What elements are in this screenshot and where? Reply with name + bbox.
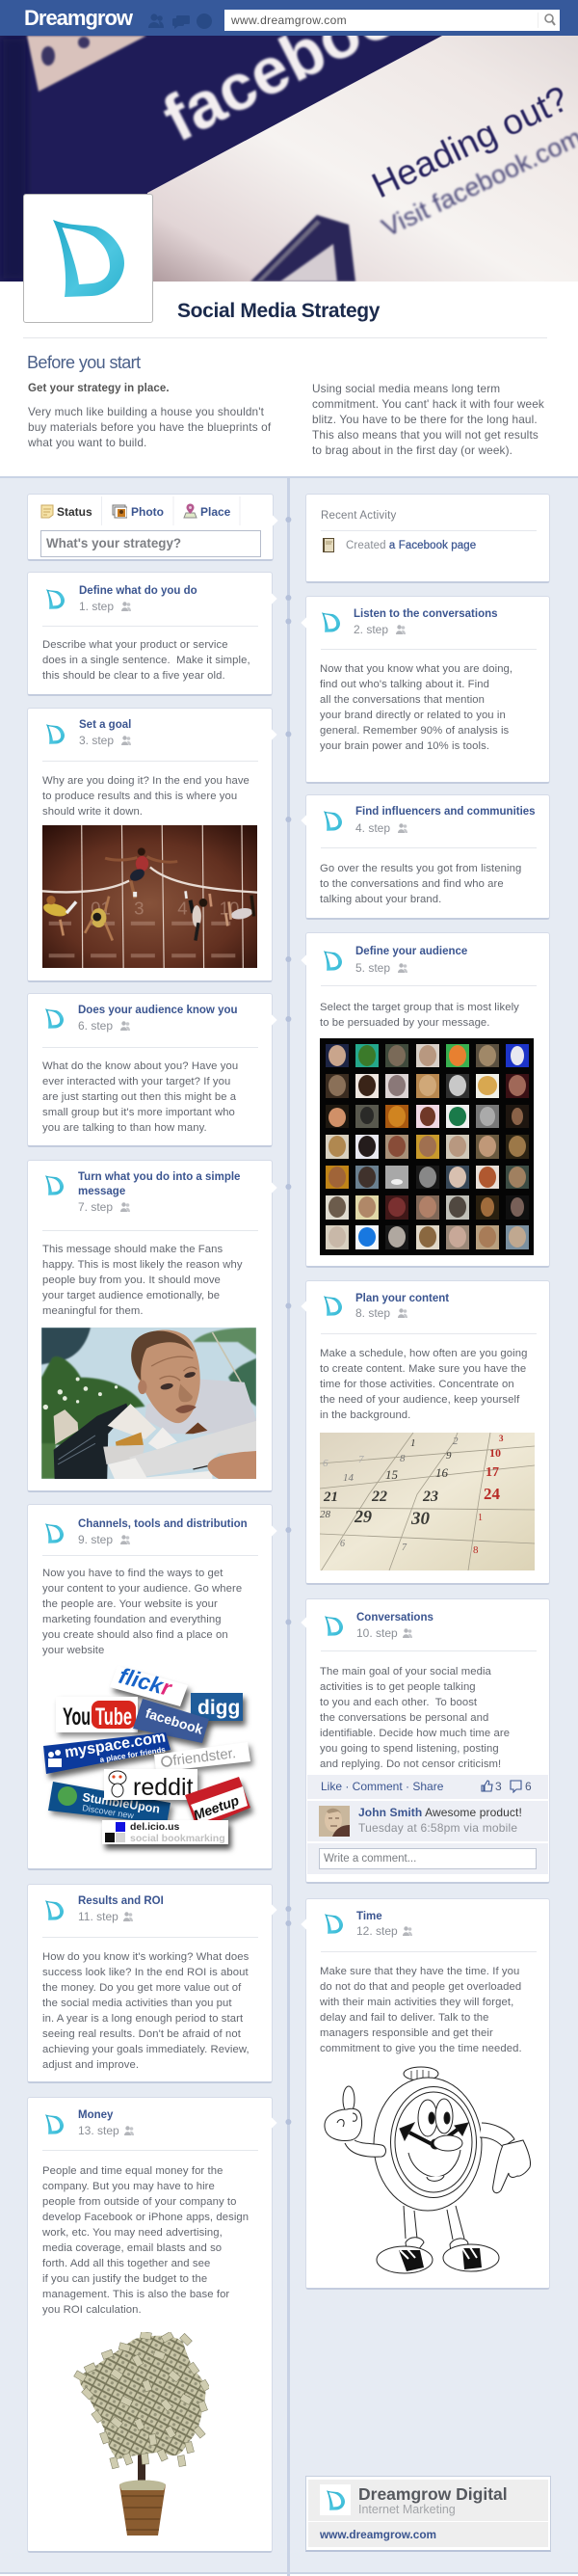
search icon (538, 13, 556, 28)
step number (356, 1923, 412, 1939)
pointer (301, 815, 312, 826)
title: Social Media Strategy (177, 300, 380, 322)
step number: 9. step (78, 1533, 113, 1546)
step text: your brain power and 10% is tools. (320, 740, 489, 752)
tab separators (101, 496, 241, 525)
step text: happy. This is most likely the reason why (42, 1259, 243, 1271)
heading: Before you start (27, 353, 140, 372)
photo: man reading letter at mailbox (41, 1328, 256, 1479)
panel: step 9 channels and tools (27, 1504, 273, 1870)
image: social network logo pile: You (63, 1704, 91, 1731)
pointer (301, 954, 312, 966)
step text: managers responsible and get their (320, 2027, 493, 2039)
left paragraph: what you want to build. (28, 436, 146, 449)
search box (224, 10, 560, 31)
icon: D logo (325, 1616, 343, 1636)
icon: D logo (46, 724, 65, 744)
photo: calendar page: 1 (410, 1437, 416, 1449)
right paragraph: This also means that you will not get results (312, 428, 539, 442)
step number: 8. step (355, 1306, 390, 1320)
step title: Define what do you do (79, 585, 197, 597)
step text: in. A year is a long enough period to start (42, 2013, 243, 2025)
icon: D logo (327, 2490, 345, 2510)
divider line (321, 649, 537, 650)
step text (320, 1002, 519, 1029)
step title: Channels, tools and distribution (78, 1518, 248, 1530)
panel: step 6 does your audience know you (27, 993, 273, 1147)
step text: does in a single sentence. Make it simple, (42, 655, 250, 666)
step number: 4. step (355, 821, 390, 835)
step text: should write it down. (42, 806, 143, 818)
photo grid: audience avatars (320, 1038, 534, 1255)
step title: Conversations (356, 1612, 434, 1623)
step text: This message should make the Fans (42, 1244, 223, 1255)
image: social network logo pile: reddit (133, 1774, 194, 1801)
icon: place pin (183, 503, 197, 519)
heading: Recent Activity (321, 510, 396, 522)
step text: your target audience emotionally, be (42, 1290, 220, 1301)
right paragraph: to brag about in the first day (or week). (312, 443, 512, 457)
step text: forth. Add all this together and see (42, 2258, 210, 2269)
pointer (266, 1014, 277, 1026)
step text: with their main activities they will forget, (320, 1997, 513, 2008)
photo: calendar page: 6 (323, 1458, 328, 1469)
step number: 2. step (354, 623, 388, 636)
pointer (266, 593, 277, 604)
step text: to produce results and this is where you (42, 791, 237, 802)
timeline dots (285, 517, 291, 2125)
divider line (321, 985, 537, 986)
photo: calendar page: 6 (340, 1539, 345, 1549)
photo: calendar page: 23 (422, 1489, 438, 1505)
step text: success look like? In the end ROI is about (42, 1967, 249, 1978)
step text: to be persuaded by your message. (320, 1017, 490, 1029)
right paragraph: Using social media means long term (312, 382, 500, 395)
step text: to create content. Make sure you have the (320, 1363, 526, 1375)
step text: find out who's talking about it. Find (320, 679, 489, 690)
step text (42, 1244, 243, 1317)
icon: D logo (45, 2114, 64, 2134)
step number: 5. step (355, 961, 390, 975)
icon: D logo (324, 811, 342, 831)
step title: Results and ROI (78, 1895, 164, 1907)
photo: calendar page: 9 (446, 1450, 452, 1462)
step title: message (78, 1186, 125, 1197)
divider line (321, 530, 537, 531)
step text (320, 863, 521, 905)
step title: Money (78, 2109, 113, 2121)
photo: calendar page: 28 (320, 1509, 331, 1520)
step text: People and time equal money for the (42, 2165, 223, 2177)
comment text: John Smith Awesome product! (358, 1806, 522, 1819)
left paragraph: buy materials before you have the blueprints of (28, 420, 271, 434)
step text: commitment to give you the time needed. (320, 2043, 522, 2054)
comment row (307, 1801, 548, 1841)
photo: sprinters at finish line: 3 (134, 899, 144, 919)
panel: step 11 results and roi (27, 1884, 273, 2083)
image: social network logo pile: Discover new (82, 1803, 135, 1821)
step text: How do you know it's working? What does (42, 1951, 249, 1963)
icon: status note (40, 505, 54, 519)
icon: comment bubble (510, 1780, 522, 1793)
step text: Describe what your product or service (42, 639, 228, 651)
step text (42, 1566, 242, 1658)
badge top band (308, 2480, 548, 2521)
photo: calendar page: 7 (358, 1454, 364, 1465)
like comment share links: Like · Comment · Share (321, 1780, 443, 1793)
intro: before you start (23, 337, 547, 457)
pointer (301, 1919, 312, 1930)
step text: general. Remember 90% of analysis is (320, 725, 509, 737)
panel: recent activity (305, 494, 550, 583)
image: social network logo pile: Meetup (192, 1792, 241, 1823)
icon: D logo (45, 1900, 64, 1920)
panel: step 8 plan your content (305, 1280, 550, 1585)
divider line (321, 847, 537, 848)
image: social network logo pile: Tube (95, 1704, 132, 1731)
step number: 13. step (78, 2124, 119, 2137)
pointer (266, 1525, 277, 1537)
step number: 1. step (79, 600, 114, 613)
step text: do not do that and people get overloaded (320, 1981, 521, 1993)
step text (320, 1664, 510, 1772)
divider line (321, 1650, 537, 1651)
photo: calendar page: 16 (435, 1465, 449, 1480)
illustration: cartoon clock character (318, 2053, 539, 2285)
step number (78, 1532, 130, 1547)
photo: calendar page: 24 (484, 1485, 501, 1503)
right paragraph: blitz. You have to be there for the long haul. (312, 413, 538, 426)
photo: calendar page: 14 (343, 1472, 355, 1484)
icon: Dreamgrow D logo (53, 220, 124, 297)
panel: Dreamgrow Digital page badge (305, 2476, 551, 2552)
image: social network logo pile (39, 1663, 260, 1861)
divider line (42, 1555, 258, 1556)
likes count: 3 (495, 1780, 502, 1793)
pointer (266, 1904, 277, 1916)
step text: What do the know about you? Have you (42, 1060, 238, 1072)
icon: D logo (46, 589, 65, 609)
website link: www.dreamgrow.com (320, 2528, 436, 2541)
top navigation bar (0, 0, 578, 36)
photo: sprinters at finish line: 4 (177, 899, 187, 919)
photo: calendar page (320, 1433, 535, 1570)
step title: Plan your content (355, 1293, 449, 1304)
divider line (23, 337, 547, 338)
photo: calendar page: 17 (486, 1465, 499, 1480)
nav icons (148, 13, 212, 29)
right paragraph (312, 382, 544, 457)
step number (355, 821, 407, 835)
step text (320, 1964, 522, 2056)
step text: the social media activities than you put (42, 1998, 232, 2009)
search url: www.dreamgrow.com (231, 13, 347, 27)
step text (42, 639, 250, 682)
pointer (301, 617, 312, 629)
step text: Make sure that they have the time. If you (320, 1966, 519, 1977)
image: social network logo pile: digg (197, 1697, 240, 1719)
step number (355, 1305, 407, 1321)
step text: Now that you know what you are doing, (320, 663, 512, 675)
step number (354, 623, 406, 636)
step text: if you can justify the budget to the (42, 2273, 207, 2285)
profile picture box (23, 194, 153, 323)
step text: small group but it's more important who (42, 1107, 235, 1118)
like bar (307, 1775, 548, 1799)
icon: D logo (45, 1175, 64, 1195)
photo: sprinters at finish line: 01 (91, 899, 110, 919)
step text (42, 1949, 250, 2073)
step number (78, 1909, 133, 1924)
step text: your website (42, 1645, 104, 1656)
step number (78, 1200, 130, 1214)
image: social network logo pile: myspace.com (64, 1730, 167, 1761)
photo: calendar page: 7 (402, 1543, 407, 1553)
photo: calendar page: 29 (354, 1507, 372, 1526)
activity line: Created a Facebook page (346, 540, 476, 551)
image: social network logo pile: a place for friends (99, 1745, 167, 1764)
step number (356, 1625, 412, 1641)
panel: step 3 set a goal (27, 708, 273, 982)
image: social network logo pile: friendster. (171, 1745, 237, 1769)
step text: in the background. (320, 1409, 410, 1421)
image: social network logo pile: flickr (117, 1663, 175, 1701)
photo: calendar page: 10 (489, 1446, 501, 1460)
step title: Time (356, 1911, 382, 1922)
panel: step 7 simple message (27, 1160, 273, 1492)
step text: people from outside of your company to (42, 2196, 236, 2208)
step text: ever interacted with your target? If you (42, 1076, 230, 1087)
step text: you are talking to than how many. (42, 1122, 207, 1134)
icon: D logo (324, 951, 342, 971)
photo: calendar page: 3 (499, 1434, 504, 1443)
step text: the money. Do you get more value out of (42, 1982, 241, 1994)
right paragraph: commitment. You cant' hack it with four week (312, 397, 544, 411)
step text: to the conversations and find who are (320, 878, 504, 890)
step number: 11. step (78, 1910, 118, 1923)
step number: 12. step (356, 1924, 398, 1938)
panel: step 13 money (27, 2097, 273, 2553)
photo: calendar page: 2 (453, 1436, 459, 1447)
brand wordmark: Dreamgrow (24, 6, 132, 30)
divider line (42, 626, 258, 627)
badge link band (308, 2522, 548, 2547)
timeline spine (287, 478, 290, 2576)
step text: develop Facebook or iPhone apps, design (42, 2212, 249, 2223)
step title: Turn what you do into a simple (78, 1171, 240, 1183)
photo: calendar page: 30 (410, 1509, 430, 1529)
step text: this should be clear to a five year old. (42, 670, 225, 682)
step title: Does your audience know you (78, 1005, 238, 1016)
step text: activities is to get people talking (320, 1681, 476, 1693)
step number: 7. step (78, 1200, 113, 1214)
step text (320, 663, 512, 752)
panel: step 5 define your audience (305, 932, 550, 1268)
image: social network logo pile: social bookmarking (130, 1833, 225, 1844)
step text: the need of your audience, keep yourself (320, 1394, 519, 1406)
step text: seeing real results. Don't be afraid of not (42, 2028, 241, 2040)
panel: step 12 time (305, 1898, 550, 2290)
photo: calendar page: 1 (478, 1513, 483, 1523)
divider line (42, 1230, 258, 1231)
step number: 10. step (356, 1626, 398, 1640)
image: social network logo pile: facebook (144, 1705, 205, 1737)
step number (78, 1019, 130, 1033)
step text: company. But you may have to hire (42, 2181, 215, 2192)
photo: calendar page: 8 (400, 1453, 406, 1464)
left paragraph: Very much like building a house you shouldn't (28, 405, 264, 418)
step text: talking about your brand. (320, 894, 441, 905)
step text: your brand directly or related to you in (320, 710, 506, 721)
step title: Find influencers and communities (355, 806, 536, 818)
panel: step 4 find influencers (305, 794, 550, 920)
cover photo: facebook screen: Heading out? (366, 78, 574, 205)
pointer (266, 2117, 277, 2129)
step title (78, 1171, 240, 1197)
step text: Now you have to find the ways to get (42, 1568, 223, 1579)
badge logo square (320, 2484, 351, 2515)
panel: step 10 conversations (305, 1598, 550, 1884)
photo: calendar page: 15 (385, 1467, 399, 1482)
strategy input (40, 530, 261, 557)
comment meta: Tuesday at 6:58pm via mobile (358, 1821, 517, 1835)
step text: and replying. Do not censor criticism! (320, 1758, 501, 1770)
step text (42, 1060, 238, 1134)
step text: management. This is also the base for (42, 2289, 229, 2300)
step text: your content to your audience. Go where (42, 1583, 242, 1595)
comments count: 6 (525, 1780, 532, 1793)
photo: sprinters at finish line (42, 825, 257, 968)
divider line (42, 1937, 258, 1938)
step text: the people are. Your website is your (42, 1598, 218, 1610)
step text: Make a schedule, how often are you going (320, 1348, 527, 1359)
company name: Dreamgrow Digital (358, 2484, 508, 2504)
comment input (319, 1848, 537, 1869)
input placeholder: What's your strategy? (46, 536, 181, 550)
step number: 3. step (79, 734, 114, 747)
step text (42, 2163, 249, 2318)
left paragraph (28, 405, 272, 449)
icon: D logo (324, 1296, 342, 1316)
image: social network logo pile: del.icio.us (130, 1821, 180, 1833)
panel: step 2 listen (305, 596, 550, 784)
step number: 6. step (78, 1019, 113, 1033)
icon: D logo (325, 1914, 343, 1934)
step text: are just starting out then this might be a (42, 1091, 236, 1103)
commenter avatar (319, 1806, 350, 1837)
pointer (267, 515, 278, 526)
step number (79, 734, 131, 747)
panel: status composer (27, 494, 274, 561)
step text: achieving your goals immediately. Review, (42, 2044, 250, 2055)
place tab: Place (200, 505, 230, 519)
divider line (42, 2150, 258, 2151)
icon: thumb up (481, 1780, 493, 1792)
pointer (266, 729, 277, 740)
photo tab: Photo (131, 505, 164, 519)
icon: D logo (322, 612, 340, 632)
step text (42, 775, 250, 818)
company tagline: Internet Marketing (358, 2503, 456, 2516)
step title: Listen to the conversations (354, 608, 498, 620)
step text: Select the target group that is most likely (320, 1002, 519, 1013)
cover photo: facebook screen (0, 36, 578, 282)
photo: calendar page: 8 (473, 1544, 479, 1556)
step text: Go over the results you got from listening (320, 863, 521, 874)
pointer (301, 1301, 312, 1312)
write comment row (307, 1843, 548, 1874)
image: money tree (73, 2332, 209, 2537)
step number (355, 961, 407, 975)
icon: book (323, 538, 334, 552)
step text: delay and fail to deliver. Talk to the (320, 2012, 489, 2024)
step text: The main goal of your social media (320, 1666, 491, 1677)
photo: calendar page: 22 (371, 1489, 387, 1505)
icon: D logo (45, 1523, 64, 1543)
icon: photo (112, 505, 127, 519)
pointer (301, 1617, 312, 1628)
step text: marketing foundation and everything (42, 1614, 222, 1625)
step text: people buy from you. It should move (42, 1275, 221, 1286)
step text: identifiable. Decide how much time are (320, 1728, 510, 1739)
panel: step 1 define what you do (27, 572, 273, 696)
lead sentence: Get your strategy in place. (28, 383, 170, 394)
step text: you create should also find a place on (42, 1629, 228, 1641)
step number (79, 600, 131, 613)
divider line (321, 1951, 537, 1952)
step text: all the conversations that mention (320, 694, 485, 706)
pointer (266, 1182, 277, 1194)
step text: you ROI calculation. (42, 2304, 142, 2316)
step text: Why are you doing it? In the end you have (42, 775, 250, 787)
step text: meaningful for them. (42, 1305, 144, 1317)
step text: the conversations be personal and (320, 1712, 488, 1724)
icon: D logo (45, 1008, 64, 1029)
step text: to you and each other. To boost (320, 1697, 477, 1708)
photo: calendar page: 21 (323, 1489, 338, 1505)
divider line (42, 1047, 258, 1048)
step text: media coverage, email blasts and so (42, 2242, 222, 2254)
step text: adjust and improve. (42, 2059, 139, 2071)
step text: time for those activities. Concentrate on (320, 1379, 514, 1390)
photo: sprinters at finish line: 10 (219, 899, 239, 919)
status tab: Status (57, 505, 92, 519)
divider line (42, 761, 258, 762)
image: social network logo pile: StumbleUpon (82, 1790, 161, 1816)
step text: you going to spend listening, posting (320, 1743, 499, 1755)
step title: Define your audience (355, 946, 467, 957)
step text (320, 1346, 527, 1423)
step text: work, etc. You may need advertising, (42, 2227, 223, 2239)
input placeholder: Write a comment... (324, 1853, 416, 1865)
step number (78, 2123, 134, 2138)
step title: Set a goal (79, 719, 131, 731)
divider line (321, 1333, 537, 1334)
